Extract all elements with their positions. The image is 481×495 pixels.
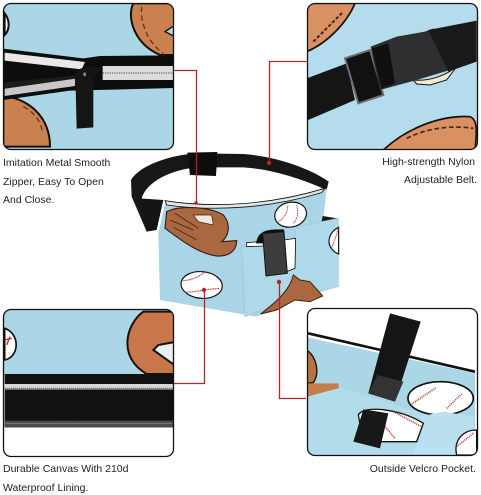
callout line: belt (267, 62, 307, 165)
panel: velcro pocket detail (307, 308, 478, 457)
text: canvas caption (3, 463, 129, 494)
callout line: canvas (174, 288, 206, 384)
text: zipper caption: Imitation Metal Smooth (3, 157, 111, 169)
buckle left (140, 198, 163, 232)
text: canvas caption: Waterproof Lining. (3, 482, 88, 494)
zipper top (165, 188, 325, 208)
velcro strap (256, 229, 287, 276)
glove top (165, 208, 237, 256)
text: belt caption: Adjustable Belt. (404, 174, 477, 186)
belt slider (187, 152, 217, 176)
baseball left (180, 270, 223, 300)
panel: buckle detail (307, 3, 478, 150)
panel: zipper detail (3, 3, 177, 150)
product: waist bag (131, 152, 339, 317)
belt strap (131, 153, 329, 232)
baseball side pocket (329, 227, 339, 254)
baseball behind velcro (247, 238, 296, 272)
bag back panel (158, 188, 338, 317)
callout line: zipper (174, 70, 198, 205)
glove bottom (261, 275, 323, 314)
side pocket rear edge (321, 216, 337, 223)
callout line: velcro pocket (277, 280, 306, 398)
text: belt caption: High-strength Nylon (382, 156, 475, 168)
baseball top (272, 199, 309, 230)
text: zipper caption: And Close. (3, 194, 54, 206)
text: velcro caption: Outside Velcro Pocket. (370, 463, 476, 475)
text: zipper caption (3, 157, 111, 206)
text: zipper caption: Zipper, Easy To Open (3, 176, 104, 188)
panel: canvas lining detail (3, 309, 177, 457)
front pocket right (242, 218, 338, 317)
text: canvas caption: Durable Canvas With 210d (3, 463, 129, 475)
front pocket left (160, 233, 240, 313)
text: belt caption (382, 156, 477, 186)
